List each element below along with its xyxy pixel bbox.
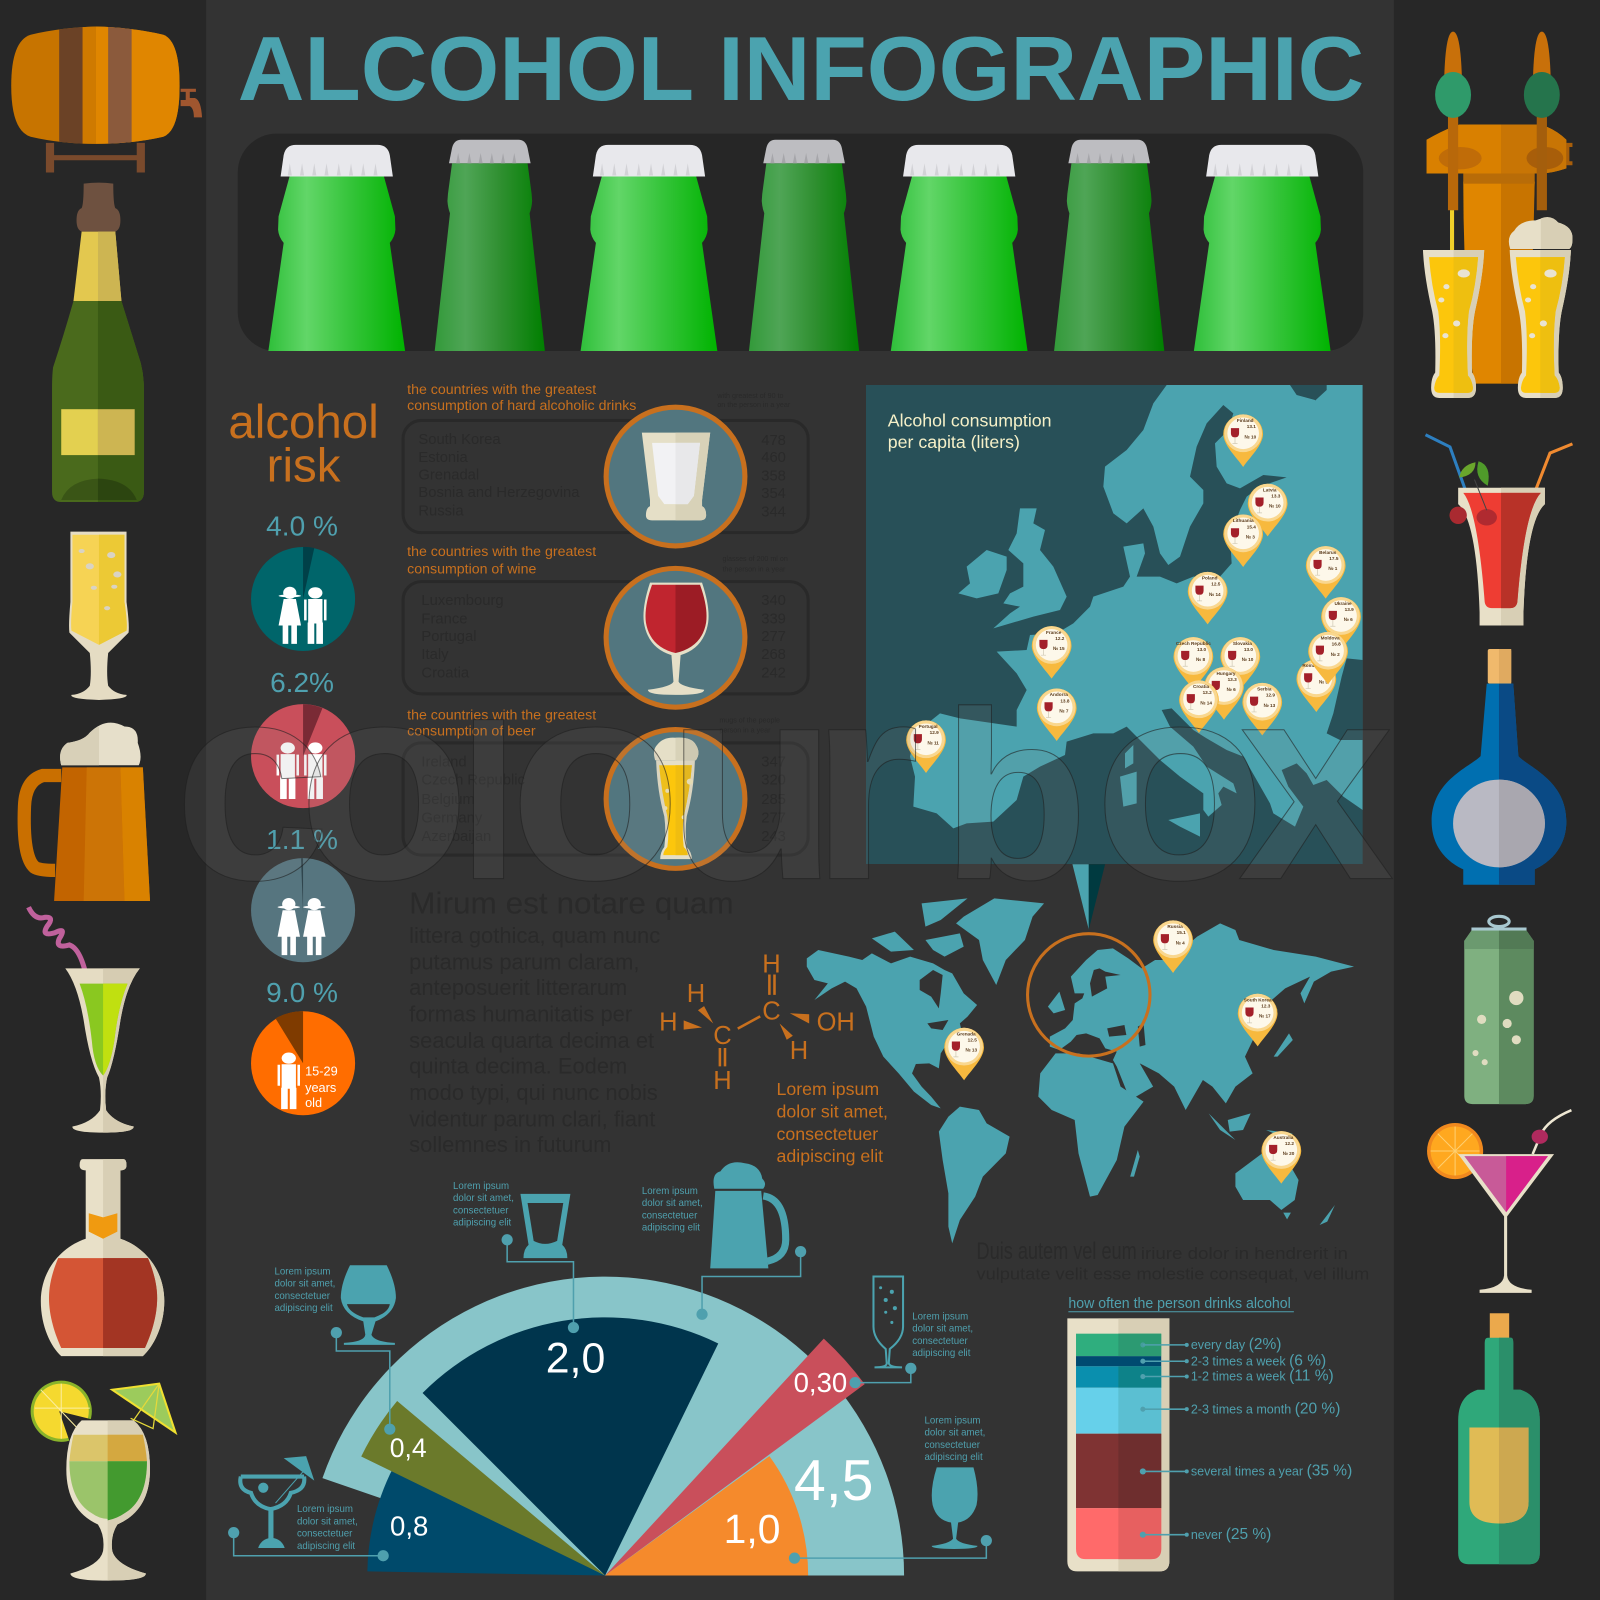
panel: beer table: consumption of beer xyxy=(407,724,536,740)
icon: red cocktail xyxy=(1426,435,1572,626)
icon: blue bottle xyxy=(1432,649,1566,885)
chart: ethanol molecule: C xyxy=(713,1022,732,1050)
chart: ethanol molecule xyxy=(659,950,855,1095)
pins: world countries: № 4 xyxy=(1176,940,1185,945)
sector: 0,30 xyxy=(605,1339,865,1576)
panel: hard alcohol table: 478 xyxy=(761,433,786,449)
callout text: shot glass xyxy=(453,1181,514,1229)
heading: alcohol risk: alcohol xyxy=(228,396,379,449)
text block: orange lorem ipsum xyxy=(777,1079,888,1166)
panel: wine table: Italy xyxy=(421,647,449,663)
icon: teal margarita xyxy=(240,1456,314,1548)
pins: Europe countries: Croatia xyxy=(1193,684,1209,689)
panel: wine table: consumption of wine xyxy=(407,561,536,577)
callout text: flute: consectetuer xyxy=(912,1336,968,1347)
callout text: flute xyxy=(912,1311,973,1359)
callout text: beer mug: dolor sit amet, xyxy=(642,1198,703,1209)
panel: beer table: Azerbaijan xyxy=(421,829,491,845)
panel: wine table: the countries with the greatest xyxy=(407,544,596,560)
panel: beer table: person in a year xyxy=(719,727,771,735)
icon: lemon cocktail xyxy=(26,1376,176,1581)
chart: ethanol molecule: H xyxy=(790,1037,808,1065)
callout text: brandy glass: consectetuer xyxy=(274,1291,331,1302)
icon: teal beer mug xyxy=(710,1162,786,1268)
icon: bottle 4 xyxy=(749,140,859,351)
right side panel xyxy=(1394,0,1600,1600)
panel: wine table: Croatia xyxy=(421,666,470,682)
pins: Europe countries: Serbia xyxy=(1257,687,1272,692)
icon: green can xyxy=(1464,916,1534,1104)
values: 0,8 xyxy=(390,1511,428,1542)
panel: wine table: Luxembourg xyxy=(421,593,504,609)
icon: teal wine glass xyxy=(932,1467,978,1549)
text block: Duis autem xyxy=(977,1238,1369,1284)
pins: Europe countries: 13.3 xyxy=(1228,677,1237,682)
pins: Europe countries: № 8 xyxy=(1196,657,1205,662)
chart: orange circle: old xyxy=(305,1095,322,1110)
panel: beer table: Germany xyxy=(421,810,483,826)
values xyxy=(390,1334,873,1552)
callout text: beer mug xyxy=(642,1186,703,1234)
pins: Europe countries: Lithuania xyxy=(1233,518,1254,523)
text block: Duis autem: Duis autem vel eum xyxy=(977,1238,1137,1265)
pins: Europe countries xyxy=(906,414,1361,773)
pins: Europe countries: № 1 xyxy=(1328,566,1338,571)
stat: 1.1 percent: 1.1 % xyxy=(266,824,338,855)
chart: red circle xyxy=(251,704,355,808)
icon: bottle 7 xyxy=(1194,145,1331,351)
chart: ethanol molecule: H xyxy=(659,1009,678,1037)
watermark: o xyxy=(298,624,470,939)
pins: Europe countries: № 10 xyxy=(1244,434,1257,439)
icon: beer glass circle xyxy=(606,730,745,868)
callout text: brandy glass xyxy=(274,1266,335,1314)
chart: drink units pie xyxy=(322,1277,904,1576)
panel: wine table: France xyxy=(421,611,467,627)
map: world xyxy=(807,898,1354,1243)
chart: ethanol molecule: H xyxy=(762,950,781,978)
pins: world countries: 12.3 xyxy=(1261,1004,1271,1009)
panel: hard alcohol table: 354 xyxy=(761,486,786,502)
panel: hard alcohol table: 358 xyxy=(761,469,786,485)
callout text: beer mug: consectetuer xyxy=(642,1210,698,1221)
icon: bottle 6 xyxy=(1054,140,1164,351)
pins: Europe countries: № 14 xyxy=(1200,700,1212,705)
callout text: shot glass: adipiscing elit xyxy=(453,1218,512,1229)
callout text: brandy glass: adipiscing elit xyxy=(274,1303,333,1314)
panel: wine table: 339 xyxy=(761,611,786,627)
pins: Europe countries: № 10 xyxy=(1242,657,1254,662)
callout text: margarita: adipiscing elit xyxy=(297,1541,355,1552)
callout text: beer mug: adipiscing elit xyxy=(642,1223,700,1234)
chart: orange circle: years xyxy=(305,1080,336,1095)
legend labels: several times a year (35 %) xyxy=(1191,1463,1352,1480)
legend labels: 2-3 times a month (20 %) xyxy=(1191,1400,1340,1417)
pins: Europe countries: Slovakia xyxy=(1233,641,1252,646)
legend labels: 2-3 times a week (6 %) xyxy=(1191,1352,1326,1369)
values: 0,30 xyxy=(794,1367,847,1398)
sector: 0,4 xyxy=(361,1401,605,1576)
watermark: c xyxy=(173,624,330,939)
caption: alcohol consumption: per capita (liters) xyxy=(888,432,1020,452)
text block: Mirum est notare quam: videntur parum clari, fiant xyxy=(409,1107,655,1132)
icon: bottle 3 xyxy=(581,145,717,351)
panel: beer table: 285 xyxy=(761,792,786,808)
chart: ethanol molecule: H xyxy=(713,1067,732,1095)
panel: hard alcohol table: 344 xyxy=(761,504,786,520)
arrow: map pointer xyxy=(1072,864,1105,930)
panel: beer table: 320 xyxy=(761,773,786,789)
icon: beer glass right xyxy=(1509,217,1573,398)
callout text: wine glass: adipiscing elit xyxy=(924,1452,983,1463)
chart: ethanol molecule: C xyxy=(762,997,781,1025)
icon: barrel xyxy=(11,20,202,172)
panel: beer table: Belgium xyxy=(421,792,475,808)
pins: Europe countries: № 10 xyxy=(1269,504,1281,509)
icon: bottle 5 xyxy=(891,145,1028,351)
panel: hard alcohol table: Grenadal xyxy=(418,468,479,484)
values: 1,0 xyxy=(724,1506,780,1552)
callout text: flute: Lorem ipsum xyxy=(912,1311,968,1322)
pins: Europe countries: 13.0 xyxy=(1244,647,1253,652)
text block: Mirum est notare quam: formas humanitatis per xyxy=(409,1001,632,1026)
panel: hard alcohol table: Estonia xyxy=(418,450,468,466)
values: 0,4 xyxy=(390,1433,427,1463)
pins: Europe countries: 17.5 xyxy=(1329,556,1339,561)
pins: Europe countries: 12.9 xyxy=(930,730,939,735)
icon: teal brandy glass xyxy=(341,1265,396,1345)
heading: how often: how often the person drinks alcohol xyxy=(1068,1296,1291,1312)
pins: Europe countries: № 13 xyxy=(1264,703,1276,708)
watermark: r xyxy=(810,624,920,939)
panel: wine table: 277 xyxy=(761,629,786,645)
chart: teal circle xyxy=(251,547,355,651)
pins: Europe countries: № 6 xyxy=(1344,617,1353,622)
legend labels: never (25 %) xyxy=(1191,1526,1271,1543)
panel: hard alcohol table: the countries with the greatest xyxy=(407,382,596,398)
icon: beer glass left xyxy=(1423,250,1484,398)
pins: Europe countries: 13.2 xyxy=(1203,690,1212,695)
sector: 4,5 light xyxy=(322,1277,904,1576)
pins: Europe countries: Andorra xyxy=(1050,692,1068,697)
pins: Europe countries: France xyxy=(1046,630,1062,635)
text block: orange lorem ipsum: adipiscing elit xyxy=(777,1146,883,1166)
icon: wine glass circle xyxy=(606,568,745,707)
panel: wine table xyxy=(403,544,808,694)
callout text: shot glass: consectetuer xyxy=(453,1205,509,1216)
panel: hard alcohol table: on the person in a year xyxy=(717,401,791,409)
panel: hard alcohol table: Russia xyxy=(418,503,464,519)
panel: beer table: mugs of the people xyxy=(719,716,780,724)
callout text: wine glass: consectetuer xyxy=(924,1440,981,1451)
pins: Europe countries: Romania xyxy=(1302,663,1323,668)
icon: decanter xyxy=(41,1159,164,1356)
text block: Mirum est notare quam: modo typi, qui nunc nobis xyxy=(409,1080,658,1105)
text block: Mirum est notare quam: quinta decima. Eodem xyxy=(409,1053,627,1078)
pins: Europe countries: № 11 xyxy=(927,740,939,745)
text block: Duis autem: iriure dolor in hendrerit in xyxy=(1141,1245,1348,1263)
panel: bottle strip xyxy=(238,134,1363,351)
callout text: wine glass xyxy=(924,1415,985,1463)
text block: Duis autem: vulputate velit esse molestie consequat, vel illum xyxy=(977,1266,1369,1284)
callout text: wine glass: dolor sit amet, xyxy=(924,1428,985,1439)
icon: martini xyxy=(1427,1110,1571,1293)
icon: green bottle xyxy=(1458,1313,1540,1564)
pins: world countries: 15.1 xyxy=(1177,930,1186,935)
pins: Europe countries: Moldova xyxy=(1321,635,1340,640)
panel: hard alcohol table xyxy=(403,382,808,533)
text block: Mirum est notare quam: putamus parum claram, xyxy=(409,949,639,974)
chart: orange circle xyxy=(251,1011,355,1115)
pins: Europe countries: № 2 xyxy=(1331,652,1340,657)
text block: orange lorem ipsum: dolor sit amet, xyxy=(777,1101,888,1121)
panel: wine table: 268 xyxy=(761,647,786,663)
panel: beer table: Czech Republic xyxy=(421,773,525,789)
panel: hard alcohol table: Bosnia and Herzegovina xyxy=(418,485,580,501)
watermark: x xyxy=(1238,624,1396,939)
legend labels xyxy=(1191,1336,1352,1543)
caption: alcohol consumption: Alcohol consumption xyxy=(888,411,1052,431)
icon: champagne flute xyxy=(69,532,129,700)
icon: beer tower with two glasses xyxy=(1423,32,1573,398)
icon: shot glass circle xyxy=(606,407,745,546)
chart: ethanol molecule: OH xyxy=(817,1009,855,1037)
pins: world countries: South Korea xyxy=(1244,997,1272,1002)
pins: Europe countries: 13.1 xyxy=(1247,424,1256,429)
pins: world countries: 12.5 xyxy=(968,1038,977,1043)
pins: world countries xyxy=(944,920,1301,1184)
pins: world countries: № 13 xyxy=(965,1048,977,1053)
text block: orange lorem ipsum: consectetuer xyxy=(777,1124,878,1144)
callout lines xyxy=(228,1234,992,1564)
watermark: o xyxy=(1094,624,1266,939)
panel: wine table: Portugal xyxy=(421,629,476,645)
text block: Mirum est notare quam: seacula quarta decima et xyxy=(409,1028,654,1053)
pins: world countries: Australia xyxy=(1273,1135,1294,1140)
panel: hard alcohol table: South Korea xyxy=(418,432,501,448)
pins: Europe countries: 12.2 xyxy=(1055,636,1065,641)
panel: wine table: the person in a year xyxy=(722,565,786,573)
pins: Europe countries: Hungary xyxy=(1217,671,1236,676)
watermark: l xyxy=(458,681,519,926)
watermark: o xyxy=(509,624,681,939)
pins: Europe countries: 12.9 xyxy=(1266,693,1275,698)
pins: Europe countries: 15.4 xyxy=(1247,524,1256,529)
values: 2,0 xyxy=(546,1334,605,1382)
text block: Mirum est notare quam xyxy=(409,886,734,1157)
icon: bottle 2 xyxy=(435,140,545,351)
icon: bottle 1 xyxy=(268,145,405,351)
icon: beer mug xyxy=(24,723,150,901)
pins: Europe countries: 16.8 xyxy=(1332,642,1341,647)
icon: green cocktail xyxy=(29,907,140,1133)
pins: Europe countries: 13.9 xyxy=(1345,607,1354,612)
stat: 9.0 percent: 9.0 % xyxy=(266,977,338,1008)
sector: 2,0 xyxy=(423,1317,718,1576)
chart: slate circle xyxy=(251,858,355,962)
circle: Europe highlight xyxy=(1028,934,1150,1056)
pins: Europe countries: Portugal xyxy=(919,724,938,729)
callout text: brandy glass: Lorem ipsum xyxy=(274,1266,330,1277)
pins: world countries: Grenada xyxy=(957,1031,976,1036)
callout text: shot glass: dolor sit amet, xyxy=(453,1193,514,1204)
panel: beer table xyxy=(403,707,808,855)
panel: wine table: glasses of 200 ml on xyxy=(722,555,788,563)
callout text: margarita: consectetuer xyxy=(297,1529,353,1540)
panel: hard alcohol table: with greatest of 90 to xyxy=(716,392,784,400)
legend labels: every day (2%) xyxy=(1191,1336,1281,1353)
legend labels: 1-2 times a week (11 %) xyxy=(1191,1368,1334,1385)
text block: orange lorem ipsum: Lorem ipsum xyxy=(777,1079,879,1099)
pins: Europe countries: 14.4 xyxy=(1320,669,1329,674)
panel: beer table: 347 xyxy=(761,754,786,770)
map: Europe xyxy=(866,385,1363,864)
left side panel xyxy=(0,0,206,1600)
callout text: margarita: dolor sit amet, xyxy=(297,1516,358,1527)
chart: ethanol molecule: H xyxy=(687,980,705,1008)
panel: beer table: 243 xyxy=(761,829,786,845)
caption: alcohol consumption xyxy=(888,411,1052,452)
title: ALCOHOL INFOGRAPHIC xyxy=(238,19,1364,120)
pins: Europe countries: 12.5 xyxy=(1211,582,1221,587)
chart: orange circle: 15-29 xyxy=(305,1064,338,1079)
pins: world countries: 12.2 xyxy=(1285,1141,1294,1146)
pins: Europe countries: № 3 xyxy=(1246,534,1255,539)
callout text: beer mug: Lorem ipsum xyxy=(642,1186,698,1197)
pins: Europe countries: Poland xyxy=(1202,575,1218,580)
panel: alcohol risk xyxy=(228,396,379,1115)
icon: champagne bottle xyxy=(52,183,144,502)
callout text: shot glass: Lorem ipsum xyxy=(453,1181,509,1192)
stat: 4.0 percent: 4.0 % xyxy=(266,511,338,542)
heading: risk: risk xyxy=(267,440,341,493)
pins: Europe countries: № 14 xyxy=(1209,592,1221,597)
pins: Europe countries: 13.8 xyxy=(1060,698,1070,703)
pins: Europe countries: № 5 xyxy=(1319,679,1328,684)
pins: world countries: № 17 xyxy=(1259,1014,1271,1019)
panel: beer table: 277 xyxy=(761,810,786,826)
callout text: margarita xyxy=(297,1504,358,1552)
sector: 0,8 xyxy=(367,1468,605,1576)
chart: frequency glass xyxy=(1067,1318,1352,1571)
icon: teal shot glass xyxy=(520,1194,570,1258)
watermark: u xyxy=(666,624,838,939)
legend lines xyxy=(1140,1342,1189,1538)
pins: world countries: № 20 xyxy=(1283,1151,1295,1156)
callout text: margarita: Lorem ipsum xyxy=(297,1504,353,1515)
icon: teal flute xyxy=(873,1277,903,1367)
panel: wine table: 340 xyxy=(761,593,786,609)
pins: Europe countries: 13.0 xyxy=(1197,647,1206,652)
text block: Mirum est notare quam: anteposuerit litterarum xyxy=(409,975,627,1000)
pins: Europe countries: Belarus xyxy=(1319,550,1337,555)
panel: wine table: 242 xyxy=(761,666,786,682)
pins: Europe countries: 13.3 xyxy=(1271,494,1281,499)
panel: hard alcohol table: consumption of hard alcoholic drinks xyxy=(407,398,636,414)
text block: Mirum est notare quam: littera gothica, quam nunc xyxy=(409,923,660,948)
callout text: brandy glass: dolor sit amet, xyxy=(274,1279,335,1290)
stat: 6.2 percent: 6.2% xyxy=(270,667,334,698)
pins: Europe countries: Ukraine xyxy=(1334,601,1352,606)
text block: Mirum est notare quam: sollemnes in futurum xyxy=(409,1132,611,1157)
values: 4,5 xyxy=(794,1449,873,1513)
panel: beer table: the countries with the greatest xyxy=(407,707,596,723)
pins: Europe countries: Czech Republic xyxy=(1176,641,1211,646)
watermark: b xyxy=(942,662,1088,930)
panel: hard alcohol table: 460 xyxy=(761,450,786,466)
pins: Europe countries: Finland xyxy=(1237,418,1254,423)
pins: Europe countries: Latvia xyxy=(1263,487,1277,492)
pins: Europe countries: № 15 xyxy=(1053,646,1065,651)
callout text: wine glass: Lorem ipsum xyxy=(924,1415,980,1426)
pins: Europe countries: № 6 xyxy=(1227,687,1236,692)
pins: world countries: Russia xyxy=(1167,924,1183,929)
pins: Europe countries: № 7 xyxy=(1059,708,1069,713)
callout text: flute: adipiscing elit xyxy=(912,1348,971,1359)
sector: 1,0 xyxy=(605,1456,808,1576)
callout text: flute: dolor sit amet, xyxy=(912,1324,973,1335)
text block: Mirum est notare quam: Mirum est notare quam xyxy=(409,886,734,920)
panel: beer table: Ireland xyxy=(421,754,467,770)
